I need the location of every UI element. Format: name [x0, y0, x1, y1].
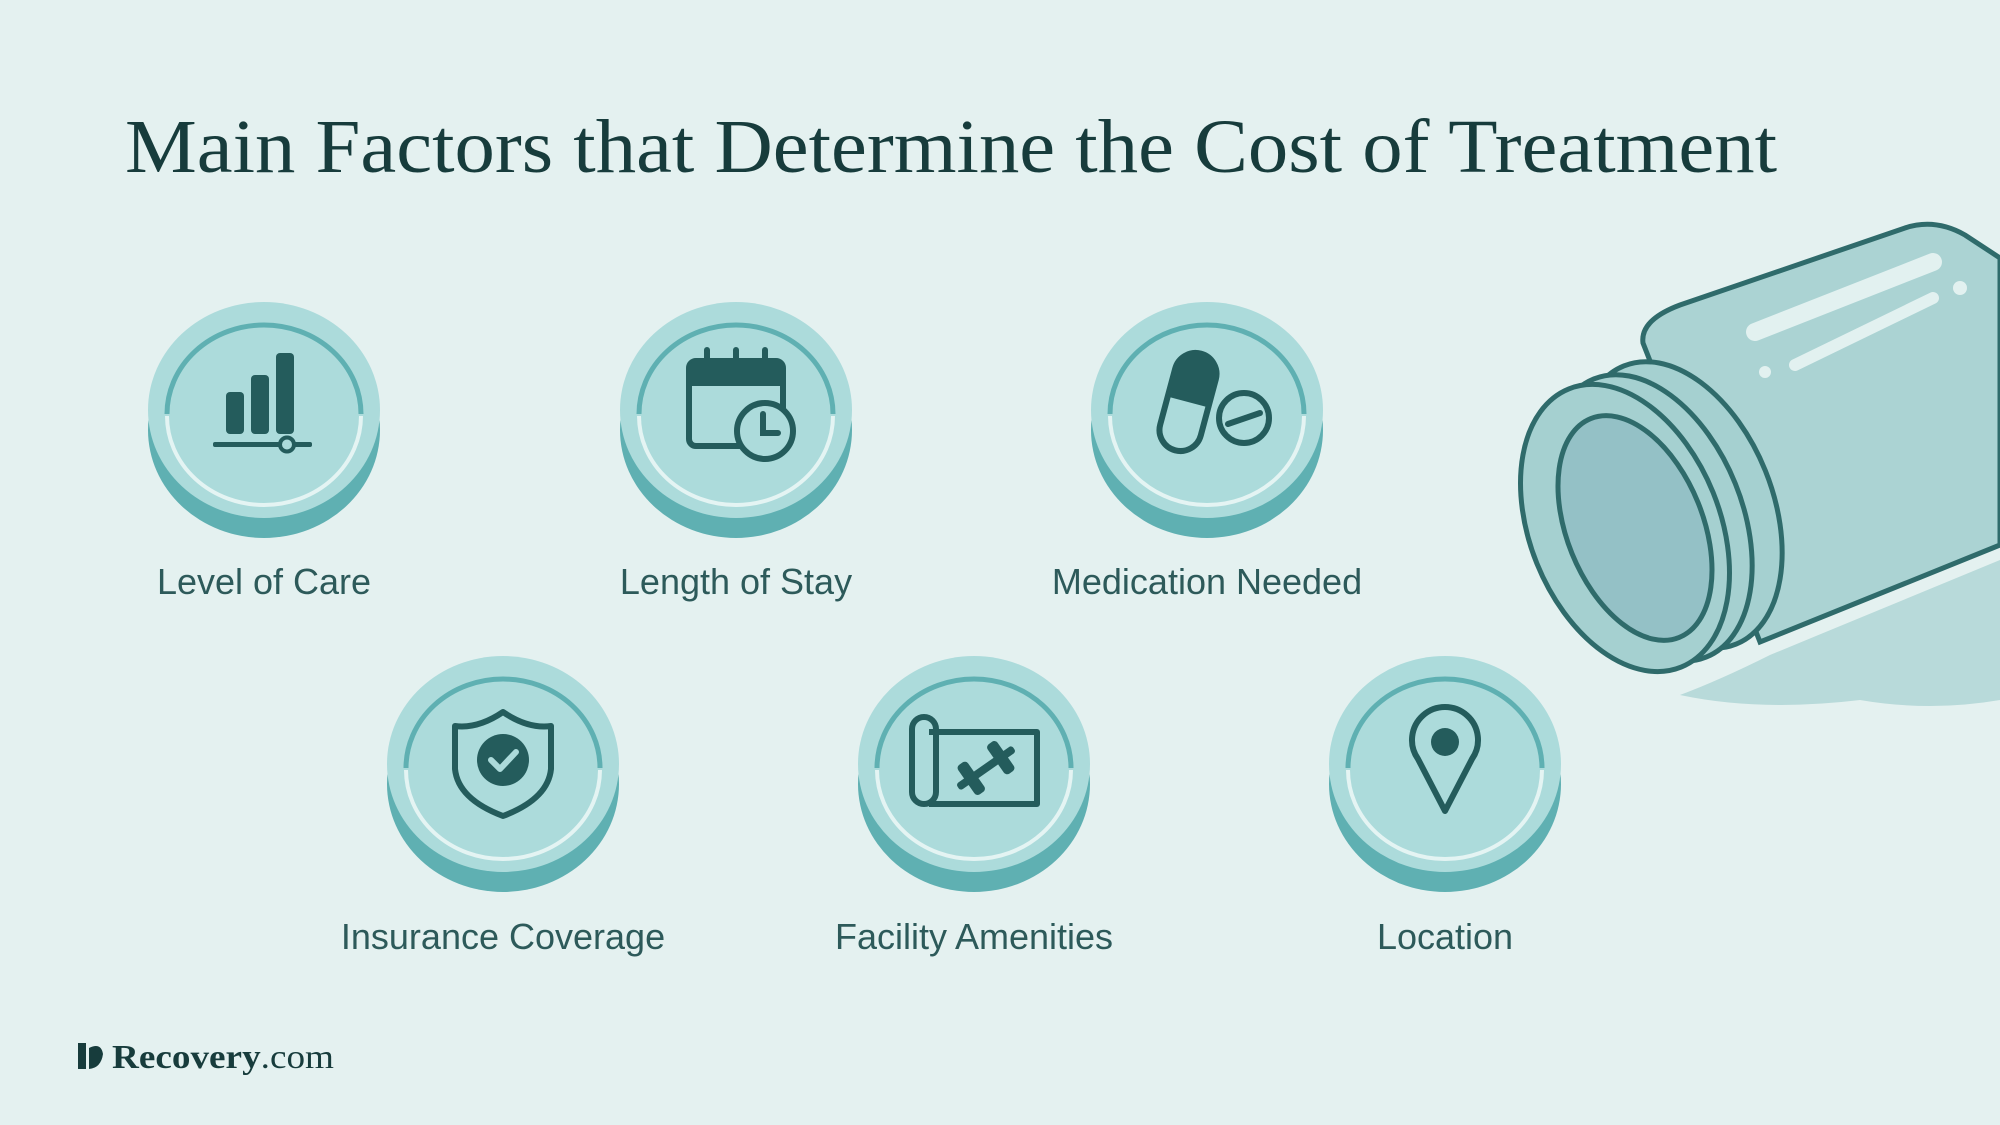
factor: Medication Needed: [1052, 302, 1362, 602]
icon: shield check: [455, 712, 551, 816]
logo: Recovery .com: [112, 1039, 334, 1076]
coin: medication: [1091, 302, 1323, 538]
title: Main Factors that Determine the Cost of Treatment: [125, 105, 1777, 189]
coin: facility: [858, 656, 1090, 892]
coin: length of stay: [620, 302, 852, 538]
factor: Length of Stay: [620, 302, 852, 602]
coin: location: [1329, 656, 1561, 892]
factor: Insurance Coverage: Insurance Coverage: [341, 916, 665, 957]
coin: insurance: [387, 656, 619, 892]
factor: Facility Amenities: Facility Amenities: [835, 916, 1113, 957]
icon: calendar with clock: [689, 347, 793, 459]
factor: Location: [1329, 656, 1561, 957]
factor: Facility Amenities: [835, 656, 1113, 957]
factor: Medication Needed: Medication Needed: [1052, 561, 1362, 602]
factor: Level of Care: Level of Care: [157, 561, 371, 602]
factor: Level of Care: [148, 302, 380, 602]
icon: pills: [1155, 348, 1269, 456]
icon: map with dumbbell: [912, 717, 1037, 804]
factor: Insurance Coverage: [341, 656, 665, 957]
icon: map pin: [1412, 707, 1478, 811]
factor: Location: Location: [1377, 916, 1513, 957]
coin: level of care: [148, 302, 380, 538]
illustration: pill bottle: [1481, 224, 2000, 706]
icon: bar chart: [213, 353, 312, 452]
factor: Length of Stay: Length of Stay: [620, 561, 852, 602]
